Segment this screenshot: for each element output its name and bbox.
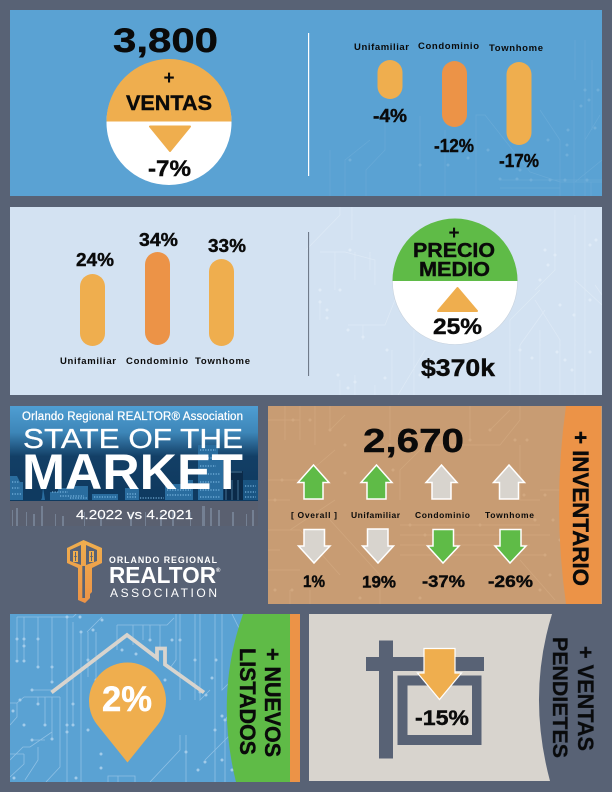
badge: precio medio: MEDIO: [419, 259, 490, 281]
chart: precio por tipo: Townhome: [195, 356, 250, 367]
chart: ventas por tipo: Unifamiliar: [354, 42, 409, 53]
chart: precio por tipo: [60, 230, 250, 367]
icon: key house: [67, 540, 102, 603]
icon: house roof: [52, 635, 204, 692]
banner: state of the market: Orlando Regional REALTOR® Association: [22, 411, 243, 423]
arrows up: [298, 465, 524, 499]
total ventas: 3,800: [113, 22, 218, 60]
logo: orlando regional realtor association: ASSOCIATION: [110, 586, 217, 600]
badge: precio medio: +: [448, 223, 460, 244]
logo: orlando regional realtor association: REALTOR: [109, 562, 216, 588]
chart: ventas por tipo: -17%: [499, 151, 539, 171]
tab: inventario: [559, 406, 601, 604]
chart: precio por tipo: 24%: [76, 250, 114, 270]
chart: precio por tipo: 33%: [208, 236, 246, 256]
panel: precio medio: [10, 205, 602, 395]
percentages: 1%: [303, 572, 325, 591]
percentages: 19%: [362, 572, 396, 592]
banner: state of the market: 4.2022 vs 4.2021: [76, 507, 193, 522]
category labels: [ Overall ]: [291, 510, 337, 520]
icon: location pin: 2%: [102, 680, 152, 719]
category labels: Unifamiliar: [351, 510, 401, 520]
arrows down: [298, 529, 526, 563]
logo: orlando regional realtor association: ®: [216, 567, 221, 574]
tab: nuevos listados: [227, 614, 300, 782]
heading: ventas pendientes: PENDIETES: [548, 637, 571, 758]
percentages: [303, 572, 533, 592]
chart: precio por tipo: Condominio: [126, 356, 188, 367]
badge: ventas: -7%: [148, 156, 191, 181]
icon: for sale sign: -15%: [415, 707, 469, 730]
badge: precio medio: [392, 219, 518, 344]
banner: state of the market: MARKET: [22, 444, 243, 500]
panel: ventas: [10, 10, 602, 196]
tab: inventario: + INVENTARIO: [568, 431, 593, 586]
chart: ventas por tipo: Condominio: [418, 41, 479, 52]
divider: [308, 33, 309, 176]
chart: precio por tipo: Unifamiliar: [60, 356, 116, 367]
total inventario: 2,670: [363, 422, 464, 459]
badge: ventas: VENTAS: [126, 92, 212, 115]
chart: ventas por tipo: -4%: [373, 106, 407, 126]
chart: ventas por tipo: -12%: [434, 136, 474, 156]
chart: ventas por tipo: [354, 41, 543, 171]
tab: nuevos listados: + NUEVOS: [260, 648, 285, 757]
tab: nuevos listados: LISTADOS: [235, 648, 260, 755]
chart: ventas por tipo: Townhome: [489, 43, 543, 54]
badge: precio medio: PRECIO: [413, 240, 495, 262]
skyline: [10, 445, 258, 500]
precio valor: $370k: [421, 355, 496, 382]
logo: orlando regional realtor association: ORLANDO REGIONAL: [109, 555, 218, 565]
logo: orlando regional realtor association: [67, 540, 221, 603]
badge: ventas: +: [163, 68, 175, 89]
heading: ventas pendientes: [548, 637, 598, 758]
badge: precio medio: 25%: [433, 314, 482, 339]
category labels: Townhome: [485, 510, 534, 520]
icon: location pin: [89, 663, 166, 762]
panel: ventas pendientes: [309, 614, 598, 781]
icon: for sale sign: [366, 640, 484, 758]
category labels: [291, 510, 534, 520]
badge: ventas: [106, 59, 232, 185]
arrow: [418, 648, 462, 700]
panel: nuevos listados: [10, 612, 300, 782]
chart: precio por tipo: 34%: [139, 230, 178, 250]
banner: state of the market: [10, 406, 258, 526]
category labels: Condominio: [415, 510, 470, 520]
banner: state of the market: STATE OF THE: [23, 423, 243, 454]
percentages: -37%: [422, 572, 465, 591]
heading: ventas pendientes: + VENTAS: [573, 646, 598, 751]
percentages: -26%: [488, 572, 533, 591]
divider: [308, 232, 309, 376]
panel: inventario: [268, 406, 602, 604]
reflection: [10, 501, 258, 526]
